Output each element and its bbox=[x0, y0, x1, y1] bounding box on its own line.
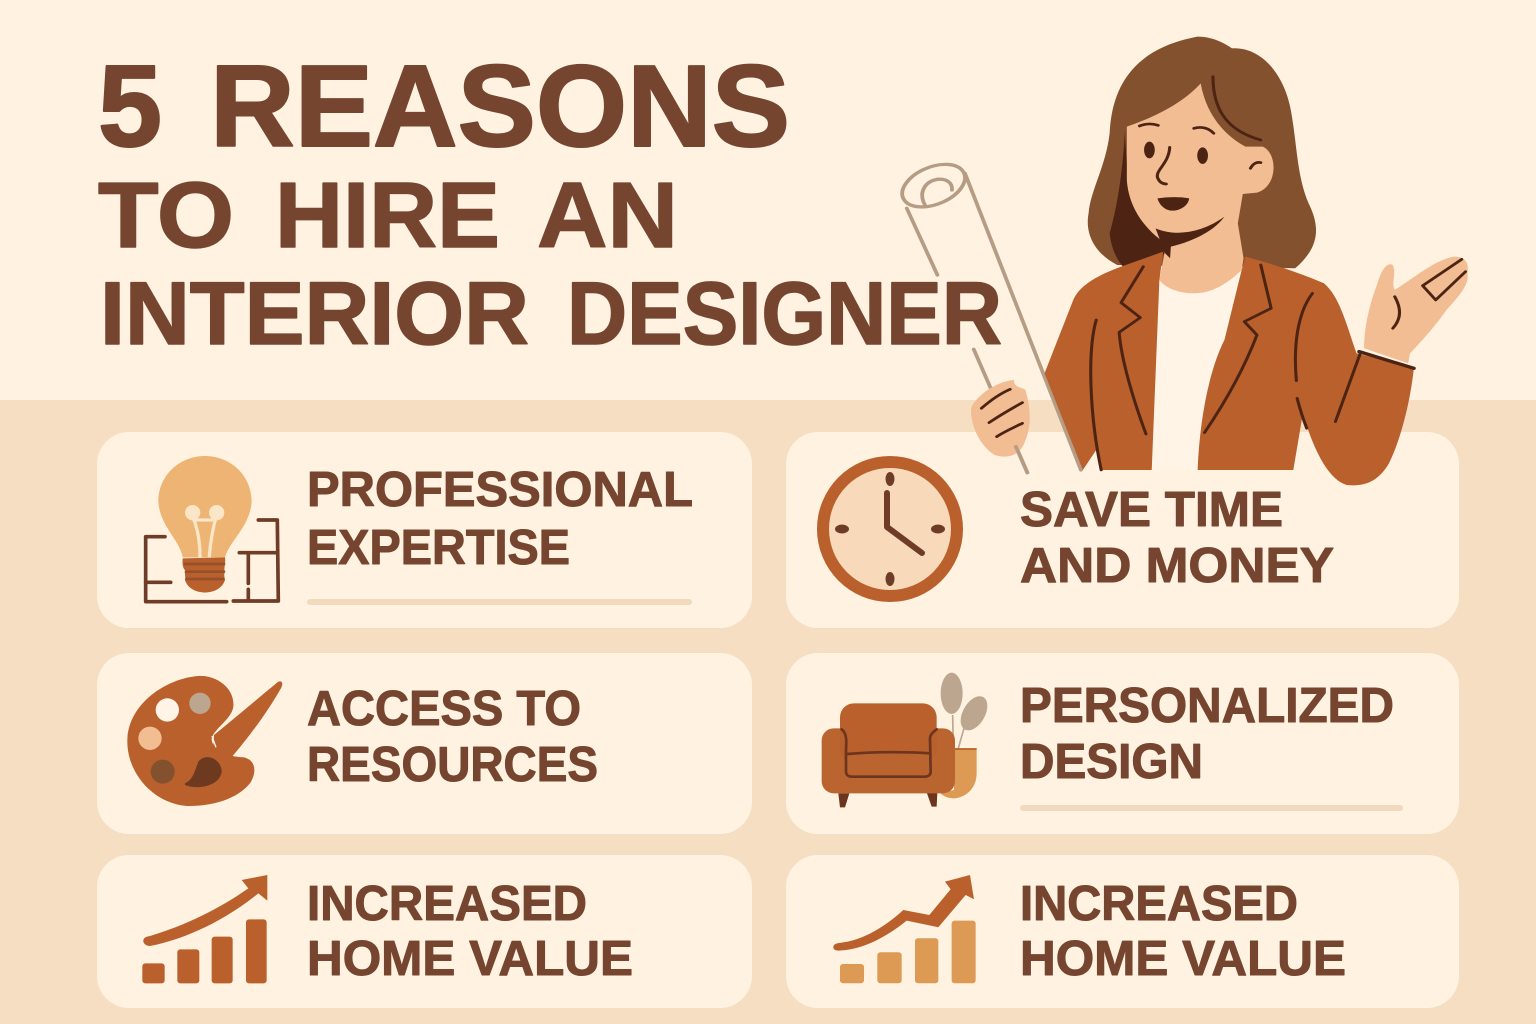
heading: SAVE TIME bbox=[1020, 483, 1283, 537]
dark jaw shadow bbox=[1156, 217, 1224, 258]
illustration: designer with blueprint roll bbox=[894, 37, 1468, 485]
facial features and line details bbox=[981, 77, 1466, 470]
panel: increased home value right bbox=[786, 855, 1459, 1008]
title: HIRE bbox=[275, 163, 500, 267]
hair bbox=[1088, 37, 1316, 268]
heading: DESIGN bbox=[1020, 735, 1203, 789]
heading: INCREASED bbox=[1020, 877, 1298, 931]
icon: armchair and plant bbox=[822, 673, 993, 807]
panel: access to resources bbox=[97, 653, 752, 834]
heading bbox=[307, 877, 633, 986]
heading: INCREASED bbox=[307, 877, 587, 931]
hands bbox=[1364, 257, 1468, 363]
panel: save time and money bbox=[786, 432, 1459, 628]
shirt bbox=[1152, 267, 1244, 470]
panel: personalized design bbox=[786, 653, 1459, 834]
title: DESIGNER bbox=[567, 263, 1002, 363]
heading: RESOURCES bbox=[307, 738, 598, 792]
title: AN bbox=[537, 163, 678, 267]
icon: light bulb and floor plan bbox=[146, 456, 278, 602]
heading bbox=[1020, 877, 1346, 986]
title: TO bbox=[98, 163, 234, 267]
heading: HOME VALUE bbox=[307, 932, 633, 986]
heading: HOME VALUE bbox=[1020, 932, 1346, 986]
heading: PERSONALIZED bbox=[1020, 679, 1394, 733]
heading bbox=[1020, 483, 1334, 593]
heading bbox=[1020, 679, 1394, 789]
jacket bbox=[1045, 252, 1163, 470]
heading: AND MONEY bbox=[1020, 539, 1334, 593]
icon: paint palette bbox=[127, 676, 282, 806]
heading bbox=[307, 682, 598, 792]
icon: rising bar chart bbox=[142, 875, 267, 983]
title: REASONS bbox=[210, 41, 790, 171]
heading bbox=[307, 463, 693, 575]
panel: professional expertise bbox=[97, 432, 752, 628]
blueprint roll bbox=[894, 156, 1081, 473]
title: 5 bbox=[98, 41, 162, 171]
title: INTERIOR bbox=[100, 263, 529, 363]
heading: ACCESS TO bbox=[307, 682, 581, 736]
icon: clock bbox=[817, 456, 963, 602]
panel: increased home value left bbox=[97, 855, 752, 1008]
heading: PROFESSIONAL bbox=[307, 463, 693, 517]
icon: zigzag bar chart bbox=[833, 875, 976, 983]
title bbox=[98, 41, 1002, 363]
face and neck bbox=[1127, 83, 1274, 293]
heading: EXPERTISE bbox=[307, 521, 570, 575]
